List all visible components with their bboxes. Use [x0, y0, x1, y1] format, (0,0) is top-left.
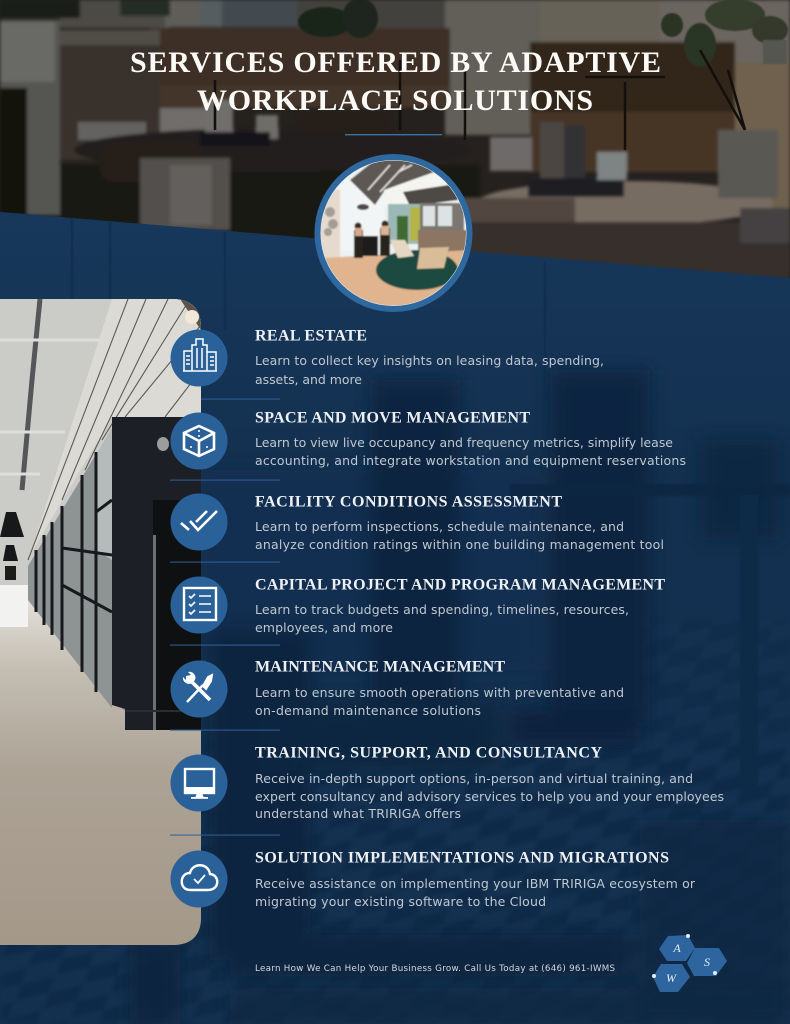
icon: wrench and screwdriver — [170, 660, 228, 718]
icon: cube — [170, 412, 228, 470]
service: maintenance management — [170, 658, 624, 718]
description: Learn to view live occupancy and frequency metrics, simplify lease — [255, 435, 673, 450]
description: employees, and more — [255, 620, 393, 635]
description: on-demand maintenance solutions — [255, 703, 481, 718]
description — [255, 685, 624, 718]
service: real estate — [170, 328, 604, 387]
description: Learn to collect key insights on leasing data, spending, — [255, 353, 604, 368]
plants — [298, 0, 788, 67]
description: analyze condition ratings within one building management tool — [255, 537, 664, 552]
service: space and move management — [170, 410, 686, 470]
floor — [0, 600, 201, 945]
heading: TRAINING, SUPPORT, AND CONSULTANCY — [255, 744, 602, 762]
icon: checklist — [170, 576, 228, 634]
logo: AWS hexagons: A — [672, 941, 681, 955]
title: SERVICES OFFERED BY ADAPTIVE — [130, 46, 661, 79]
slatted ceiling — [30, 299, 201, 555]
logo: AWS hexagons: S — [704, 955, 710, 969]
description: assets, and more — [255, 372, 362, 387]
description: migrating your existing software to the Cloud — [255, 894, 546, 909]
description — [255, 435, 686, 468]
description: understand what TRIRIGA offers — [255, 806, 461, 821]
icon: desktop monitor — [170, 754, 228, 812]
icon: cloud check — [170, 850, 228, 908]
description: expert consultancy and advisory services to help you and your employees — [255, 789, 724, 804]
wood wall and bench — [151, 27, 451, 87]
service: solution implementations and migrations — [170, 850, 696, 909]
heading: FACILITY CONDITIONS ASSESSMENT — [255, 494, 562, 510]
heading: MAINTENANCE MANAGEMENT — [255, 658, 505, 676]
title — [130, 46, 661, 117]
background photo: blue tinted office — [0, 212, 790, 1024]
description: Receive in-depth support options, in-person and virtual training, and — [255, 771, 693, 786]
right table — [477, 181, 773, 225]
far wall — [0, 585, 28, 627]
circular photo: bright office lounge — [318, 157, 470, 309]
upper walls and windows — [60, 0, 170, 28]
background photo: cafe seating area — [0, 0, 790, 282]
icon: buildings — [170, 330, 228, 386]
left column and cabinet — [60, 30, 160, 45]
description: accounting, and integrate workstation and equipment reservations — [255, 453, 686, 468]
ceiling lamps — [0, 512, 24, 537]
large dark table — [160, 108, 210, 132]
description — [255, 876, 696, 909]
heading: SPACE AND MOVE MANAGEMENT — [255, 410, 530, 426]
service: facility conditions assessment — [170, 494, 664, 552]
heading: CAPITAL PROJECT AND PROGRAM MANAGEMENT — [255, 576, 665, 594]
dark pillar and door wall — [112, 417, 201, 730]
service: training, support, and consultancy — [170, 744, 724, 821]
photo panel: office corridor — [0, 299, 201, 945]
checker floor — [0, 740, 790, 1024]
description — [255, 771, 724, 821]
description — [255, 602, 629, 635]
wall camera — [157, 437, 169, 451]
logo: AWS hexagons: W — [666, 971, 677, 985]
description: Learn to perform inspections, schedule maintenance, and — [255, 519, 624, 534]
heading: SOLUTION IMPLEMENTATIONS AND MIGRATIONS — [255, 850, 669, 866]
blurred glass foreground — [140, 158, 230, 230]
description — [255, 519, 664, 552]
description: Learn to track budgets and spending, timelines, resources, — [255, 602, 629, 617]
title: WORKPLACE SOLUTIONS — [197, 84, 593, 117]
logo: AWS hexagons — [652, 934, 727, 992]
description: Learn to ensure smooth operations with preventative and — [255, 685, 624, 700]
description — [255, 353, 604, 387]
icon: double check — [170, 494, 228, 550]
glass wall — [28, 428, 112, 708]
service: capital project and program management — [170, 576, 665, 635]
footer call to action: Learn How We Can Help Your Business Grow. Call Us Today at (646) 961-IWMS — [255, 964, 615, 974]
heading: REAL ESTATE — [255, 328, 367, 344]
description: Receive assistance on implementing your IBM TRIRIGA ecosystem or — [255, 876, 696, 891]
